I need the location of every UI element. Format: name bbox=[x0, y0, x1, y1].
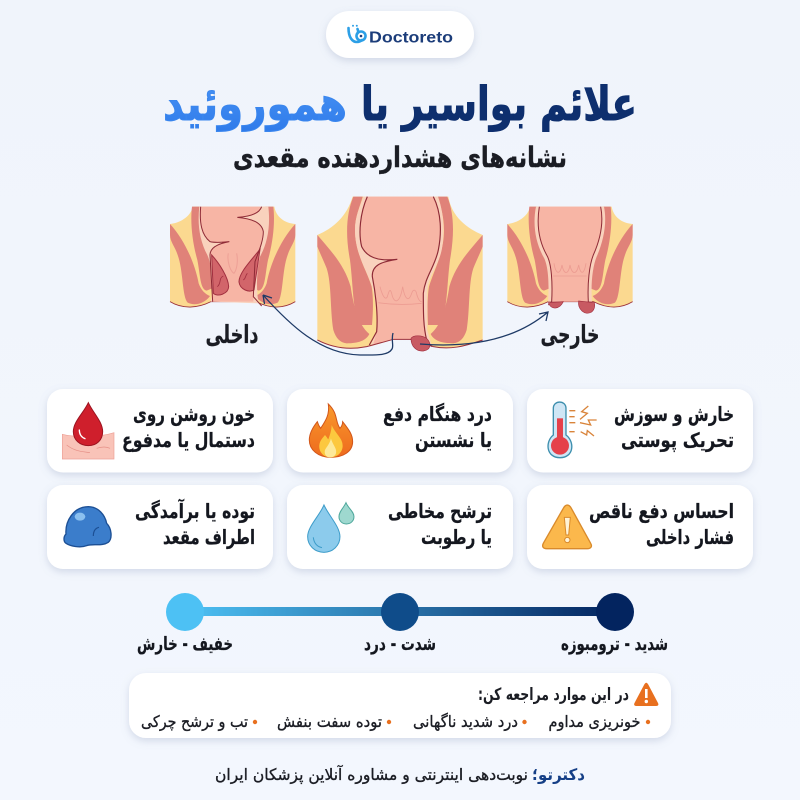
card text bbox=[614, 402, 734, 453]
label: internal: داخلی bbox=[206, 320, 259, 349]
icon: stethoscope bbox=[348, 25, 366, 42]
alert item 3: توده سفت بنفش bbox=[277, 712, 382, 732]
card text bbox=[589, 499, 734, 549]
title bbox=[163, 77, 637, 132]
node: moderate bbox=[381, 593, 419, 631]
severity timeline bbox=[137, 593, 668, 655]
icon: alert triangle bbox=[634, 683, 658, 706]
node: mild bbox=[166, 593, 204, 631]
alert box bbox=[129, 673, 671, 738]
icon: blood drop on tissue bbox=[62, 403, 114, 459]
footer bbox=[215, 765, 585, 785]
card text: فشار داخلی bbox=[646, 525, 734, 549]
icon: water drops bbox=[308, 503, 354, 552]
node: severe bbox=[596, 593, 634, 631]
card text bbox=[383, 402, 492, 452]
card text: خون روشن روی bbox=[133, 402, 255, 426]
card text: توده یا برآمدگی bbox=[135, 498, 255, 523]
card: mucus bbox=[287, 485, 513, 569]
label: severe: شدید - ترومبوزه bbox=[561, 634, 668, 655]
logo pill bbox=[326, 11, 474, 58]
title dark part: علائم بواسیر یا bbox=[361, 77, 637, 132]
arrow: center to internal bbox=[263, 295, 393, 355]
card: itching bbox=[527, 389, 753, 472]
label: mild: خفیف - خارش bbox=[137, 634, 233, 655]
card text: اطراف مقعد bbox=[163, 525, 255, 549]
card: lump bbox=[47, 485, 273, 569]
alert heading: در این موارد مراجعه کن: bbox=[478, 685, 629, 705]
card: pain bbox=[287, 389, 513, 472]
icon: flame bbox=[309, 404, 353, 457]
card text bbox=[388, 499, 492, 549]
footer brand: دکترتو؛ bbox=[532, 765, 585, 784]
card text: درد هنگام دفع bbox=[383, 402, 492, 426]
alert item 4: تب و ترشح چرکی bbox=[141, 712, 248, 732]
card text: خارش و سوزش bbox=[614, 402, 734, 426]
label: moderate: شدت - درد bbox=[364, 634, 436, 655]
card: incomplete defecation bbox=[527, 485, 753, 569]
icon: warning triangle bbox=[543, 505, 591, 549]
anatomy: center diagram bbox=[317, 197, 483, 351]
card text: دستمال یا مدفوع bbox=[122, 428, 255, 452]
card text: ترشح مخاطی bbox=[388, 499, 492, 523]
card text: تحریک پوستی bbox=[621, 428, 734, 453]
card text: یا رطوبت bbox=[421, 525, 492, 549]
arrow: center to external bbox=[420, 312, 548, 345]
anatomy: internal hemorrhoid bbox=[170, 207, 295, 307]
card: bright blood bbox=[47, 389, 273, 472]
logo wordmark: Doctoreto bbox=[369, 29, 453, 46]
card text: احساس دفع ناقص bbox=[589, 499, 734, 523]
icon: blue lump bbox=[64, 507, 111, 547]
icon: thermometer bbox=[548, 402, 597, 458]
card text: یا نشستن bbox=[415, 428, 492, 452]
subtitle: نشانه‌های هشداردهنده مقعدی bbox=[233, 141, 567, 174]
footer tagline: نوبت‌دهی اینترنتی و مشاوره آنلاین پزشکان ایران bbox=[215, 765, 528, 785]
alert item 1: خونریزی مداوم bbox=[548, 712, 640, 732]
anatomy: external hemorrhoid bbox=[507, 207, 633, 313]
card text bbox=[135, 498, 255, 549]
card text bbox=[122, 402, 255, 452]
alert item 2: درد شدید ناگهانی bbox=[413, 712, 518, 732]
label: external: خارجی bbox=[540, 320, 600, 349]
title blue part: هموروئید bbox=[163, 77, 347, 132]
